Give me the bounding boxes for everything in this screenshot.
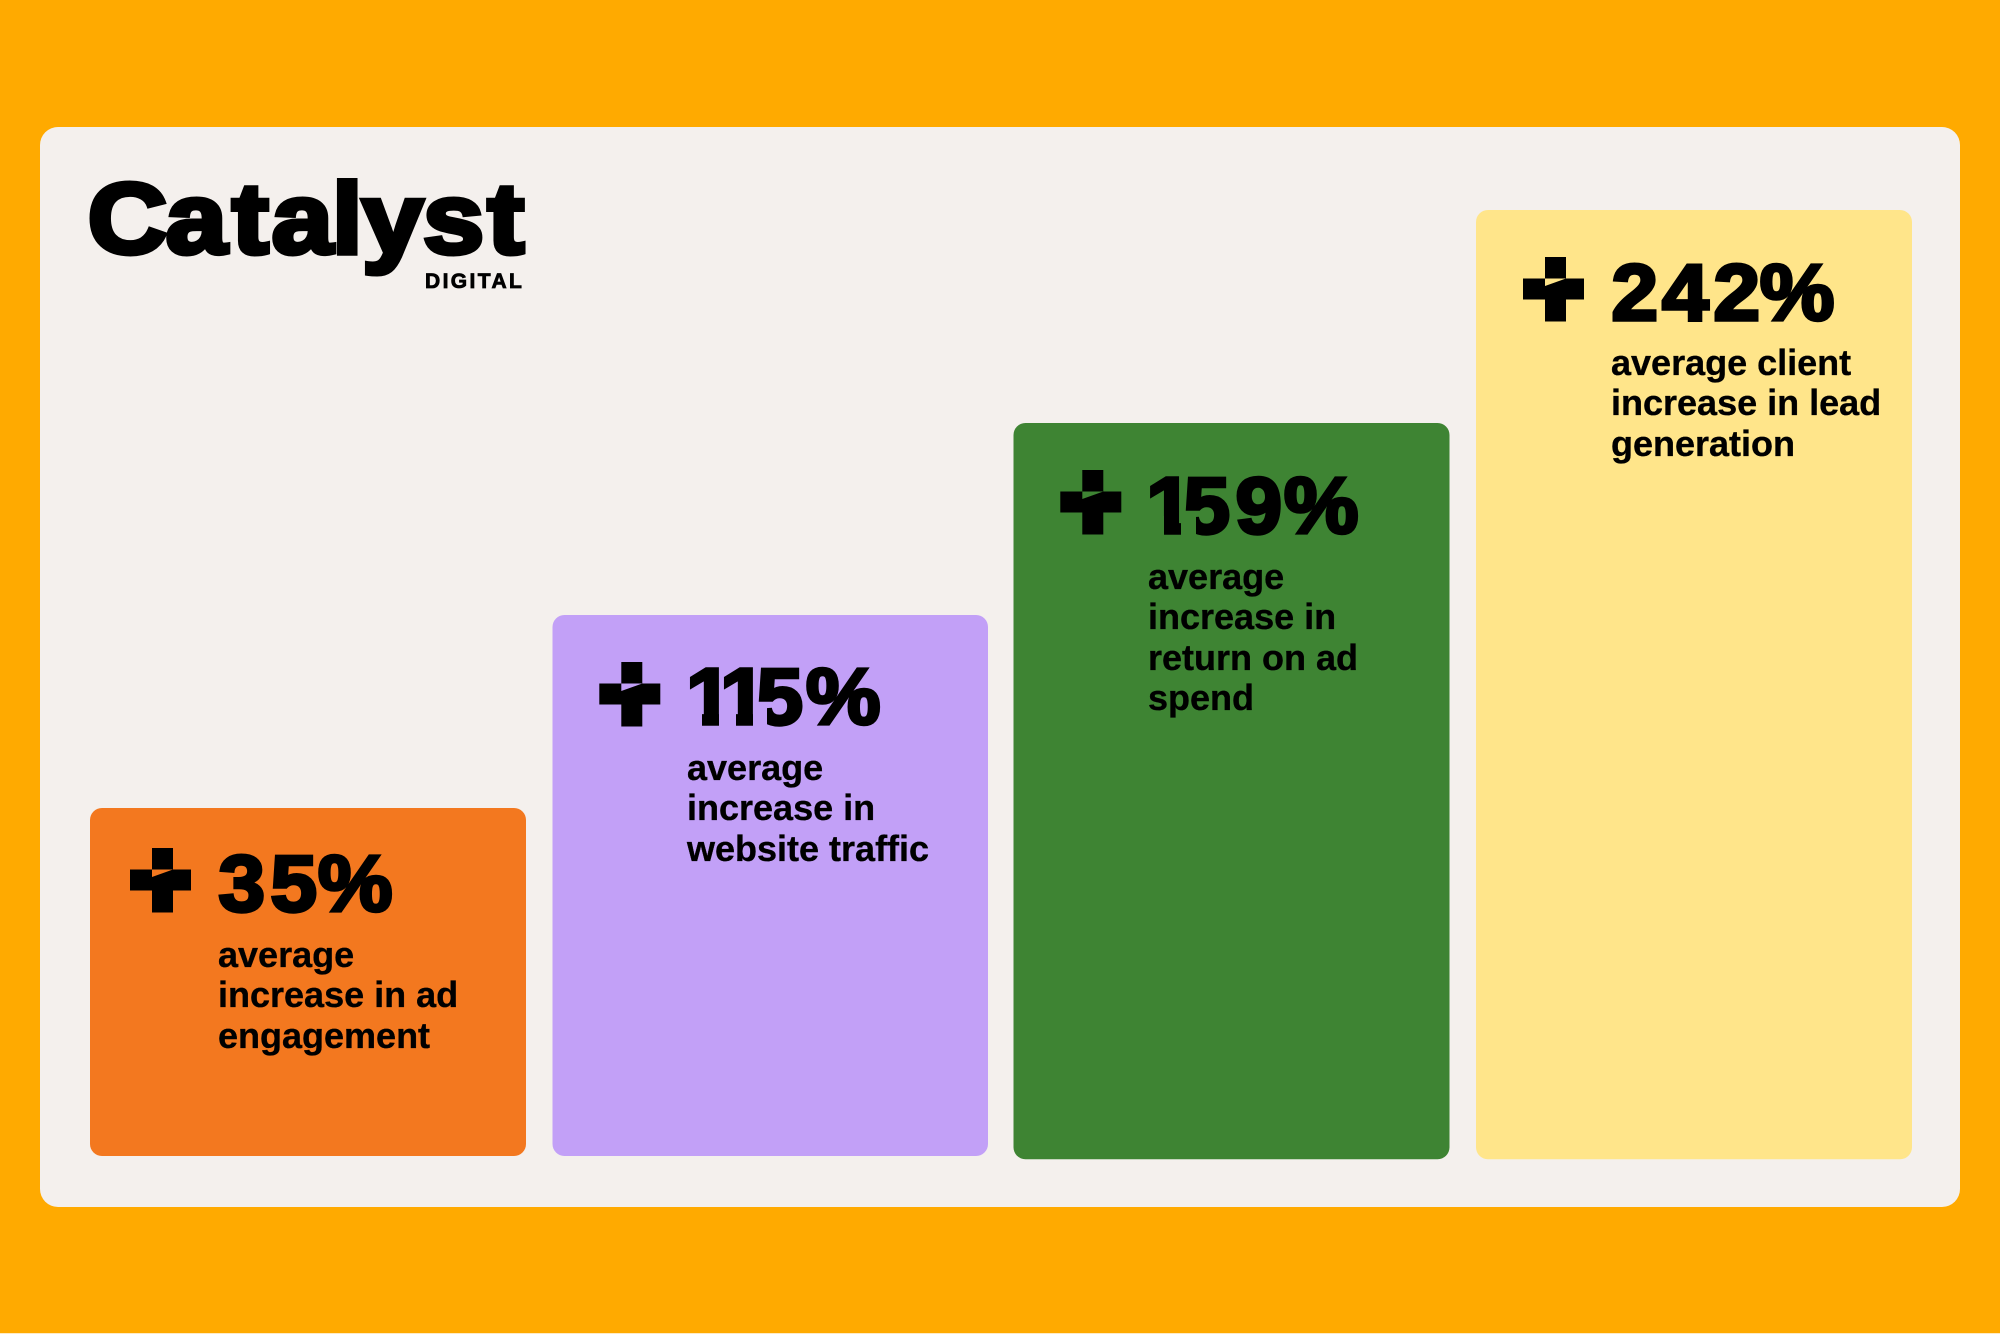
stat: 115%: 115% [686,653,881,742]
description: lead generation: average client [1611,342,1851,383]
panel: main background [40,127,1960,1207]
bar: lead generation 242% [1476,210,1912,1159]
logo: Catalyst Digital: Catalyst [88,164,524,275]
description: return on ad spend: return on ad [1148,637,1358,678]
icon: plus [130,848,191,912]
stat: 242%: 242% [1611,249,1834,338]
icon: plus [1523,257,1584,322]
description: website traffic [686,747,929,869]
description: lead generation [1611,342,1881,464]
bar: ad engagement 35% [90,808,526,1156]
description: ad engagement [218,934,458,1056]
description: return on ad spend: increase in [1148,596,1336,637]
description: lead generation: increase in lead [1611,382,1881,423]
icon: plus [599,662,660,726]
description: ad engagement: average [218,934,354,975]
description: lead generation: generation [1611,423,1795,464]
icon: plus [1060,470,1121,534]
description: website traffic: increase in [687,787,875,828]
stat: 159%: 159% [1146,462,1359,551]
bar: website traffic 115% [552,615,988,1156]
description: ad engagement: increase in ad [218,974,458,1015]
description: website traffic: website traffic [686,828,929,869]
logo: Catalyst Digital: DIGITAL [425,270,524,293]
description: return on ad spend: average [1148,556,1284,597]
description: return on ad spend [1148,556,1358,718]
description: website traffic: average [687,747,823,788]
description: return on ad spend: spend [1148,677,1254,718]
bar: return on ad spend 159% [1014,423,1450,1159]
description: ad engagement: engagement [218,1015,430,1056]
stat: 35%: 35% [218,840,393,929]
